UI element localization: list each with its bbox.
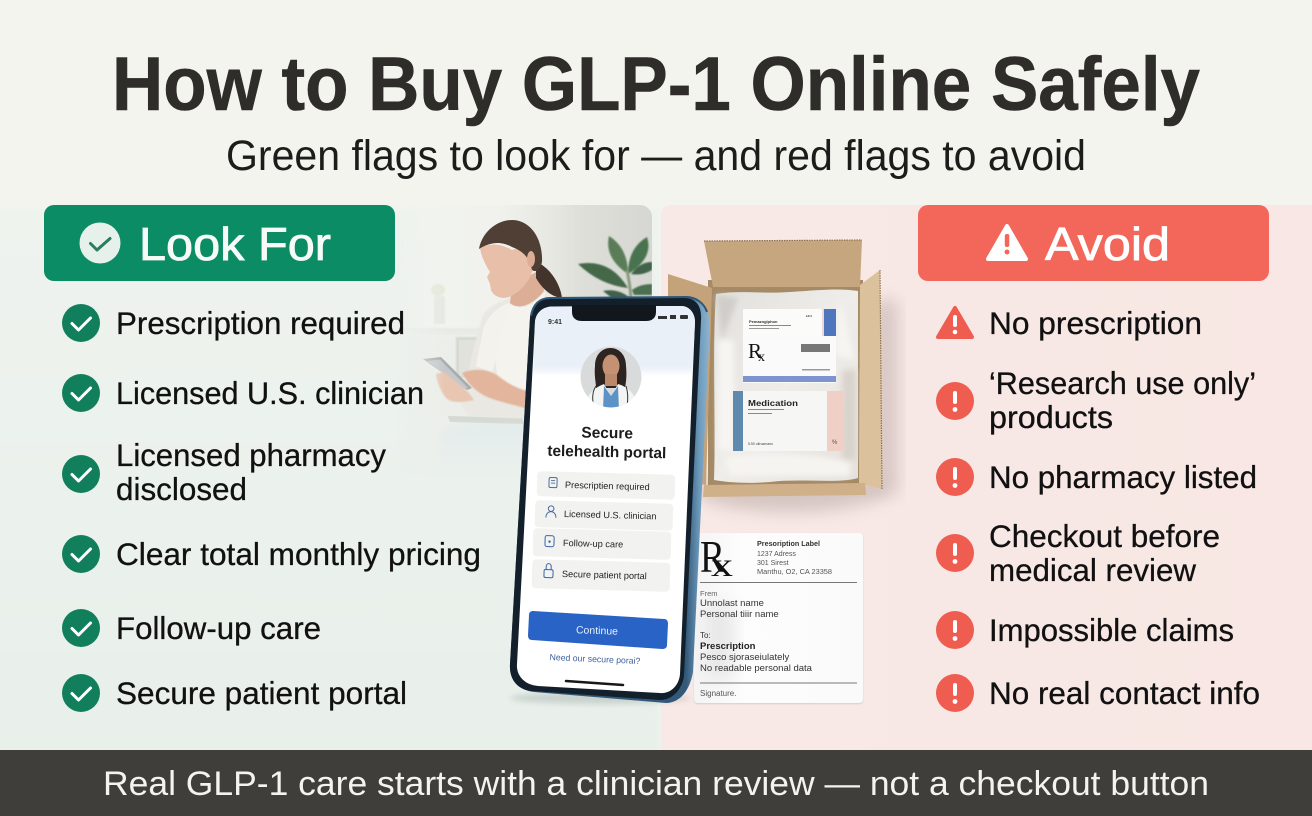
- prescription label: Personal tiiir name: [700, 609, 779, 620]
- row: Follow-up care: [533, 528, 671, 560]
- link: Need our secure porai?: [549, 652, 641, 666]
- subtitle: Green flags to look for — and red flags to avoid: [226, 133, 1086, 180]
- panel: Look For header: [44, 205, 395, 281]
- item: Follow-up care: Follow-up care: [116, 610, 321, 646]
- medicine box: top carton: Pemaznglphon: [749, 319, 778, 324]
- medicine box: Medication: %: [832, 440, 838, 446]
- illustration: open shipping box: [668, 240, 898, 512]
- phone body: [510, 297, 710, 703]
- prescription label: To:: [700, 631, 711, 640]
- phone heading: [547, 424, 667, 462]
- icon: warning triangle: [988, 226, 1026, 259]
- item: Research use only products: products: [989, 399, 1113, 435]
- item: Licensed pharmacy disclosed: Licensed pharmacy: [116, 437, 386, 473]
- tissue paper: [714, 289, 858, 483]
- status bar: [548, 315, 688, 326]
- row: Prescription required: Prescriptien required: [565, 480, 650, 492]
- footer banner: [0, 750, 1312, 816]
- item: No real contact info: No real contact info: [989, 675, 1260, 711]
- item: No pharmacy listed: No pharmacy listed: [989, 459, 1257, 495]
- row: Licensed U.S. clinician: Licensed U.S. clinician: [564, 509, 657, 521]
- left hand: [436, 372, 474, 402]
- medicine box: top carton: £4/4: [806, 314, 812, 318]
- home indicator: [566, 681, 623, 685]
- button: Continue: [528, 611, 668, 649]
- prescription label: Unnolast name: [700, 598, 764, 609]
- item: Impossible claims: Impossible claims: [989, 612, 1234, 648]
- row: Licensed U.S. clinician: [535, 500, 673, 531]
- cardigan: [470, 300, 522, 418]
- item: Licensed U.S. clinician: Licensed U.S. clinician: [116, 375, 424, 411]
- medicine box: top carton: x: [758, 350, 765, 365]
- item: Checkout before medical review: Checkout before: [989, 518, 1220, 554]
- heading: Avoid: Avoid: [1045, 218, 1170, 270]
- right flap: [859, 270, 882, 489]
- status bar: 9:41: [548, 319, 562, 326]
- phone mockup: [510, 297, 710, 704]
- item: Checkout before medical review: [936, 518, 1220, 588]
- list: green flags: [62, 304, 481, 712]
- prescription label: Manthu, O2, CA 23358: [757, 569, 832, 576]
- tablet: [423, 357, 472, 390]
- prescription label: 1237 Adress: [757, 551, 796, 558]
- prescription label: Signature.: [700, 689, 736, 698]
- item: Licensed pharmacy disclosed: disclosed: [116, 471, 247, 507]
- item: Research use only products: ‘Research use only’: [989, 365, 1256, 401]
- list: red flags: [936, 305, 1260, 712]
- heading: Look For: Look For: [139, 218, 331, 270]
- prescription label: Presoription Label: [757, 541, 820, 548]
- legs: [436, 422, 535, 478]
- item: Prescription required: Prescription required: [116, 305, 405, 341]
- doctor avatar: [580, 346, 642, 410]
- left flap: [668, 274, 712, 485]
- row: Follow-up care: Follow-up care: [563, 538, 623, 550]
- hair: [479, 220, 542, 271]
- medicine box: Medication: Medication: [748, 398, 798, 408]
- Rx symbol: R: [700, 531, 725, 582]
- row: Secure patient portal: [532, 559, 670, 592]
- phone heading: telehealth portal: [547, 443, 666, 462]
- medicine box: top carton: [743, 309, 836, 383]
- item: Research use only products: [936, 365, 1256, 435]
- medicine box: Medication: [733, 391, 843, 451]
- Rx symbol: x: [711, 547, 733, 584]
- ponytail: [536, 262, 562, 298]
- item: Licensed pharmacy disclosed: [62, 437, 386, 507]
- row: Prescription required: [537, 471, 675, 500]
- phone screen: [517, 306, 695, 693]
- panel: Avoid header: [918, 205, 1269, 281]
- item: No prescription: No prescription: [989, 305, 1202, 341]
- button: Continue: Continue: [576, 624, 618, 638]
- front flap: [703, 483, 866, 497]
- photo: woman using tablet at home: [423, 205, 652, 424]
- prescription label: 301 Sirest: [757, 560, 789, 567]
- medicine box: Medication: 5.50 ullroamans: [748, 442, 773, 446]
- prescription label: No readable personal data: [700, 663, 813, 674]
- prescription label: [694, 531, 863, 704]
- prescription label: Pesco sjoraseiulately: [700, 652, 789, 663]
- prescription label: Prescription: [700, 641, 756, 652]
- box inside: [708, 280, 863, 490]
- icon: check circle: [80, 222, 120, 264]
- neck: [510, 270, 544, 306]
- title: How to Buy GLP-1 Online Safely: [112, 42, 1200, 127]
- plant: [578, 236, 652, 298]
- medicine box: top carton: R: [748, 339, 762, 363]
- prescription label: Frem: [700, 589, 718, 598]
- ear: [527, 251, 535, 267]
- row: Secure patient portal: Secure patient portal: [562, 569, 647, 581]
- face: [480, 244, 533, 298]
- back flap: [704, 240, 862, 287]
- footer text: Real GLP-1 care starts with a clinician review — not a checkout button: [103, 765, 1209, 803]
- lap edge: [448, 416, 525, 424]
- forearm and right hand: [462, 370, 532, 410]
- phone heading: Secure: [581, 424, 634, 443]
- item: Checkout before medical review: medical review: [989, 552, 1196, 588]
- item: Secure patient portal: Secure patient portal: [116, 675, 407, 711]
- item: Clear total monthly pricing: Clear total monthly pricing: [116, 536, 481, 572]
- notch: [572, 305, 656, 321]
